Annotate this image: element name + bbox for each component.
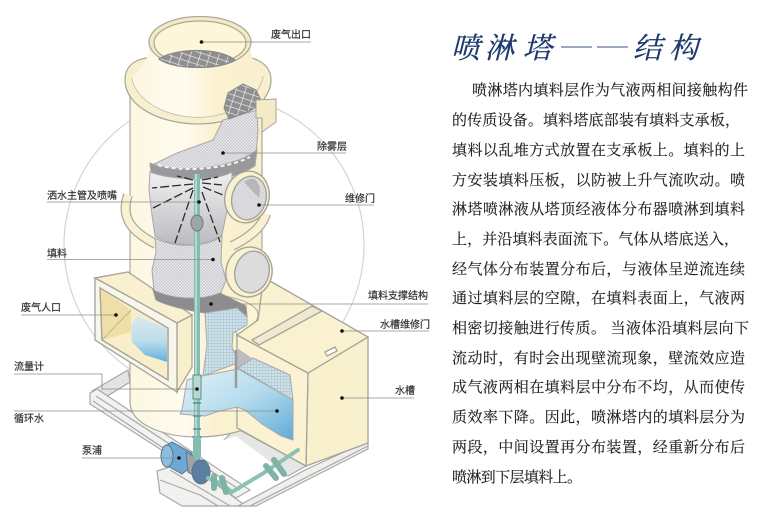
upper cutaway: demister layer [150,110,258,181]
packing layer [152,236,226,298]
label: 维修门: 维修门 [345,192,375,205]
label: 循环水 [14,409,279,425]
label: 填料支撑结构 [209,289,428,306]
water tank [237,281,368,466]
body text: 质效率下降。因此，喷淋塔内的填料层分为 [452,408,745,426]
pipe couplings [192,403,202,437]
body text: 淋塔喷淋液从塔顶经液体分布器喷淋到填料 [452,200,745,218]
label: 填料支撑结构: 填料支撑结构 [368,289,428,302]
tank divider [235,350,237,388]
body text: 经气体分布装置分布后，与液体呈逆流连续 [452,260,745,278]
label: 除雾层: 除雾层 [317,140,347,153]
label: 废气出口 [200,28,311,44]
body text: 上，并沿填料表面流下。气体从塔底送入， [452,230,739,248]
label: 填料 [47,247,215,261]
label: 废气人口: 废气人口 [21,301,61,314]
labels [14,28,430,460]
body text: 两段，中间设置再分布装置，经重新分布后 [452,439,745,456]
label: 维修门 [257,192,375,207]
body text: 通过填料层的空隙，在填料表面上，气液两 [452,289,745,307]
label: 流量计: 流量计 [14,360,44,373]
packing support structure [153,290,247,316]
tank interior packing [238,358,293,400]
label: 循环水: 循环水 [14,412,44,425]
label: 洒水主管及喷嘴 [47,189,201,204]
label: 除雾层 [221,140,347,155]
body text: 方安装填料压板，以防被上升气流吹动。喷 [452,171,745,189]
label: 泵浦: 泵浦 [82,444,102,457]
tower top cone and flange [125,16,271,124]
label: 废气人口 [21,301,118,317]
top mesh grating [159,50,235,67]
lower packing section [203,308,247,376]
tower body [130,95,262,437]
pump [161,442,210,484]
pipe highlight [195,174,197,442]
label: 废气出口: 废气出口 [271,28,311,41]
pipe valve [191,215,203,231]
inlet duct [95,272,192,392]
tank grey wedge [237,348,252,368]
discharge piping [197,440,298,492]
body text: 填料以乱堆方式放置在支承板上。填料的上 [452,141,745,159]
label: 洒水主管及喷嘴: 洒水主管及喷嘴 [47,189,117,202]
lower maintenance door [220,242,278,302]
diagram: spray tower [90,16,368,506]
label: 水槽: 水槽 [395,384,415,397]
neck flange below doors [225,296,258,338]
label: 填料: 填料 [47,247,67,260]
spray dashes [152,176,223,243]
circulation pipe [194,174,200,442]
body text: 喷淋塔内填料层作为气液两相间接触构件 [472,81,748,99]
label: 流量计 [14,360,199,391]
title [451,33,702,65]
label: 水槽维修门 [340,318,430,333]
label: 水槽维修门: 水槽维修门 [380,318,430,331]
label: 泵浦 [82,444,181,460]
body text: 流动时，有时会出现壁流现象，壁流效应造 [452,350,745,367]
water in tank and tower [180,369,293,440]
title: 喷淋塔 [451,33,557,65]
title: 结构 [633,33,702,65]
background circle [64,95,364,395]
demister pack [224,84,263,119]
skid base frame [90,370,368,506]
body text: 喷淋到下层填料上。 [452,468,582,486]
middle flange [126,195,266,246]
side frame bracket [256,99,276,132]
label: 水槽 [340,384,415,400]
middle flange face [126,195,266,246]
body text: 成气液两相在填料层中分布不均，从而使传 [452,378,745,396]
upper maintenance door [219,166,275,228]
body text: 相密切接触进行传质。 当液体沿填料层向下 [452,319,749,337]
body text: 的传质设备。填料塔底部装有填料支承板， [452,111,740,129]
flow meter [193,375,201,399]
spray section interior [149,172,232,245]
body text [452,81,749,486]
